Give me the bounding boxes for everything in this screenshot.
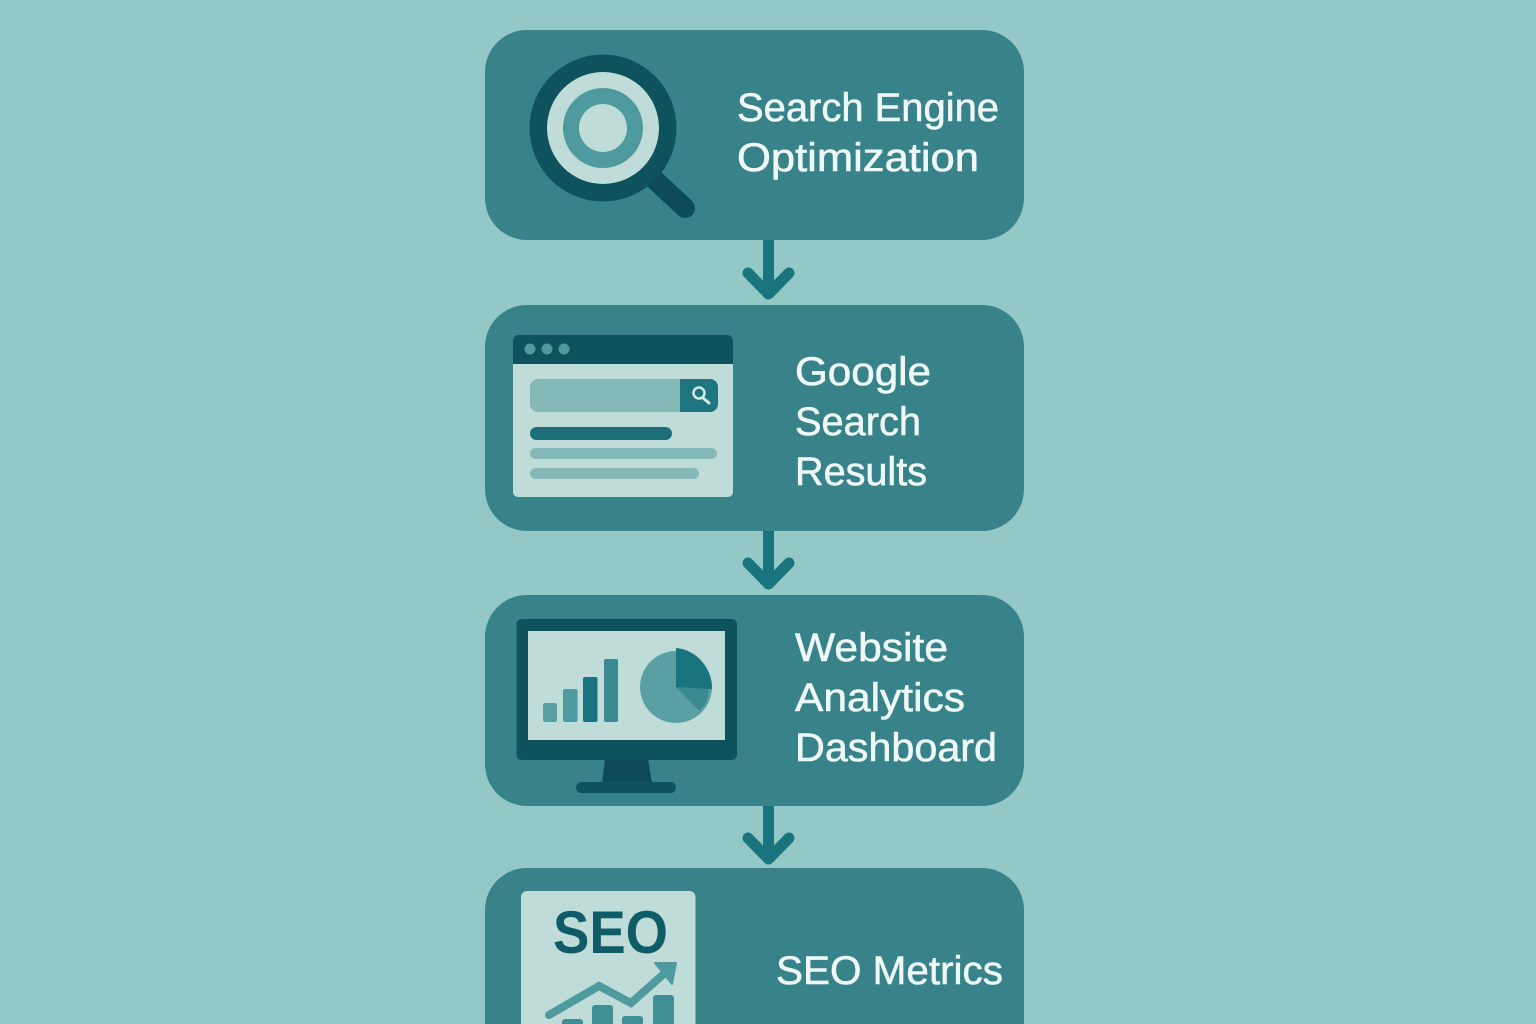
text: search engine optimization: Optimization: [737, 136, 979, 180]
icon: browser window: [513, 335, 733, 497]
text: seo icon label: SEO: [553, 899, 668, 966]
text: website analytics dashboard: Dashboard: [795, 726, 997, 770]
panel: seo metrics: [485, 868, 1024, 1024]
icon: analytics monitor: [516, 619, 737, 793]
text: google search results: Results: [795, 450, 927, 494]
icon: magnifying glass: [530, 54, 685, 208]
trend arrow: [549, 963, 676, 1015]
panel: google search results: [485, 305, 1024, 531]
arrow: analytics to metrics: [748, 804, 789, 859]
trend bars: [562, 995, 674, 1024]
text: search engine optimization: Search Engine: [737, 86, 999, 130]
panel: website analytics dashboard: [485, 595, 1024, 806]
arrow: search results to analytics: [748, 529, 789, 584]
text: website analytics dashboard: Analytics: [795, 676, 965, 720]
text: google search results: Google: [795, 350, 931, 394]
pie chart: [640, 648, 712, 723]
panel: search engine optimization: [485, 30, 1024, 240]
icon: seo report card: [521, 891, 696, 1024]
text: google search results: Search: [795, 400, 921, 444]
bar chart: [543, 659, 618, 722]
text: website analytics dashboard: Website: [795, 626, 948, 670]
arrow: SEO to search results: [748, 238, 789, 294]
text: seo metrics: SEO Metrics: [776, 949, 1003, 993]
